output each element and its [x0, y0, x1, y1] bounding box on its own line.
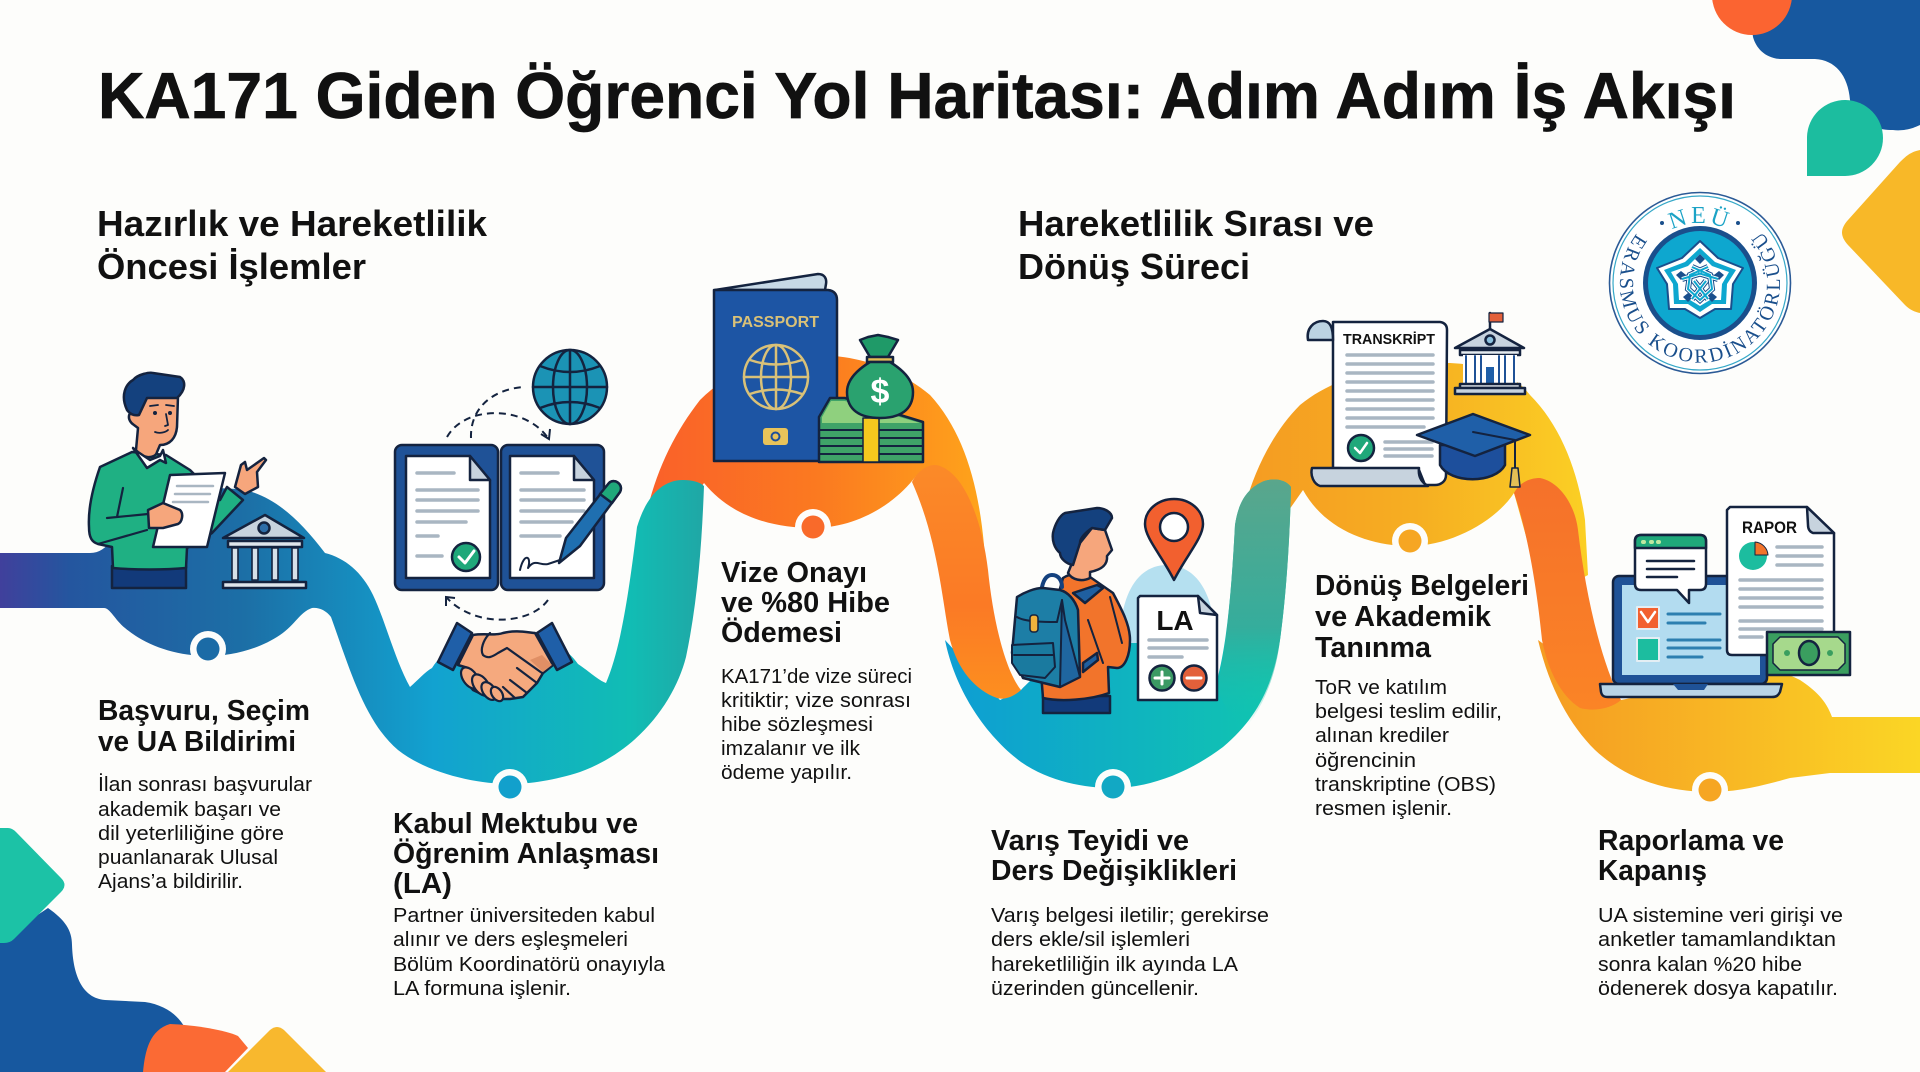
icon: passport: [714, 274, 837, 461]
icon: chat bubble: [1635, 535, 1706, 603]
step 5 text: Tanınma: [1315, 632, 1432, 664]
step 1 text: ve UA Bildirimi: [98, 726, 296, 758]
step node markers: [190, 509, 1728, 808]
icon: transcript scroll: TRANSKRİPT: [1343, 331, 1435, 348]
step 1 text: İlan sonrası başvurular: [98, 773, 312, 796]
step 3 text: [721, 557, 912, 784]
step 3 text: Vize Onayı: [721, 557, 867, 589]
logo: NEÜ Erasmus Koordinatörlüğü: ERASMUS KOORDİNATÖRLÜĞÜ: [1620, 234, 1780, 363]
step 4 text: [991, 825, 1269, 1000]
step 6 text: Kapanış: [1598, 855, 1707, 887]
step 1 text: Ajans’a bildirilir.: [98, 871, 243, 893]
icon: halo behind traveller: [1120, 565, 1215, 643]
step 2 text: Öğrenim Anlaşması: [393, 837, 659, 870]
decoration: bottom-left shapes: [0, 828, 326, 1072]
step 3 text: Ödemesi: [721, 616, 842, 649]
step 1 text: puanlanarak Ulusal: [98, 847, 278, 869]
step 5 text: öğrencinin: [1315, 750, 1416, 772]
icon: graduation cap: [1417, 414, 1530, 487]
step 4 text: Varış Teyidi ve: [991, 825, 1189, 857]
step 4 text: ders ekle/sil işlemleri: [991, 929, 1190, 951]
icon: location pin: [1145, 499, 1203, 580]
step 4 text: Varış belgesi iletilir; gerekirse: [991, 905, 1269, 927]
step 6 text: anketler tamamlandıktan: [1598, 929, 1836, 951]
step 2 text: Kabul Mektubu ve: [393, 808, 638, 840]
step 2 text: Partner üniversiteden kabul: [393, 905, 655, 927]
step 6 text: ödenerek dosya kapatılır.: [1598, 978, 1838, 1000]
step 3 text: KA171’de vize süreci: [721, 666, 912, 688]
decoration: top-right shapes: [1712, 0, 1920, 313]
icon: laptop: [1600, 576, 1782, 697]
step 2 text: LA formuna işlenir.: [393, 978, 571, 1000]
step 3 text: kritiktir; vize sonrası: [721, 690, 911, 712]
step 3 text: hibe sözleşmesi: [721, 714, 873, 736]
icon: cash stack and money bag: [819, 335, 923, 462]
icon: cash stack and money bag: $: [871, 373, 890, 411]
step 1 text: dil yeterliliğine göre: [98, 823, 284, 845]
section heading: preparation: Hazırlık ve Hareketlilik: [97, 203, 488, 244]
section heading: preparation: Öncesi İşlemler: [97, 246, 366, 287]
icon: dashed exchange arrows: [446, 387, 550, 620]
icon: banknote: [1767, 632, 1850, 675]
icon: university building: [223, 515, 306, 588]
section heading: mobility and return: Hareketlilik Sırası ve: [1018, 203, 1374, 244]
step 5 text: transkriptine (OBS): [1315, 774, 1496, 796]
icon: report document: [1727, 507, 1834, 655]
section heading: mobility and return: Dönüş Süreci: [1018, 246, 1250, 287]
icon: LA document: [1138, 596, 1217, 700]
icon: university with flag: [1455, 313, 1525, 394]
step 1 text: [98, 695, 312, 893]
step 2 text: alınır ve ders eşleşmeleri: [393, 929, 628, 951]
step 6 text: sonra kalan %20 hibe: [1598, 954, 1802, 976]
step 5 text: belgesi teslim edilir,: [1315, 701, 1502, 723]
step 5 text: resmen işlenir.: [1315, 798, 1452, 820]
icon: LA document: LA: [1156, 605, 1194, 636]
step 5 text: ve Akademik: [1315, 601, 1492, 633]
icon: globe: [533, 350, 607, 424]
step 5 text: ToR ve katılım: [1315, 677, 1447, 699]
icon: report document: RAPOR: [1742, 518, 1797, 537]
step 2 text: Bölüm Koordinatörü onayıyla: [393, 954, 666, 976]
title: KA171 Giden Öğrenci Yol Haritası: Adım Adım İş Akışı: [98, 59, 1736, 132]
step 4 text: hareketliliğin ilk ayında LA: [991, 954, 1239, 976]
step 6 text: [1598, 825, 1843, 1000]
step 6 text: UA sistemine veri girişi ve: [1598, 905, 1843, 927]
step 3 text: ödeme yapılır.: [721, 762, 852, 784]
step 2 text: [393, 808, 666, 1000]
logo: NEÜ Erasmus Koordinatörlüğü: NEÜ: [1667, 206, 1730, 229]
icon: transcript scroll: [1308, 321, 1447, 486]
icon: handshake: [438, 623, 572, 703]
step 2 text: (LA): [393, 868, 452, 900]
icon: learning agreement folder: [395, 445, 621, 590]
flow ribbon: [0, 355, 1920, 792]
step 6 text: Raporlama ve: [1598, 825, 1784, 857]
section heading: preparation: [97, 203, 488, 287]
step 5 text: Dönüş Belgeleri: [1315, 570, 1529, 602]
step 3 text: ve %80 Hibe: [721, 587, 890, 619]
step 4 text: üzerinden güncellenir.: [991, 978, 1199, 1000]
step 5 text: [1315, 570, 1529, 820]
step 4 text: Ders Değişiklikleri: [991, 855, 1237, 887]
icon: traveller with backpack: [1012, 508, 1130, 713]
step 5 text: alınan krediler: [1315, 725, 1449, 747]
icon: passport: PASSPORT: [732, 314, 819, 331]
step 3 text: imzalanır ve ilk: [721, 738, 861, 760]
step 1 text: Başvuru, Seçim: [98, 695, 310, 727]
icon: student with paper: [89, 373, 266, 588]
step 1 text: akademik başarı ve: [98, 799, 281, 821]
section heading: mobility and return: [1018, 203, 1374, 287]
